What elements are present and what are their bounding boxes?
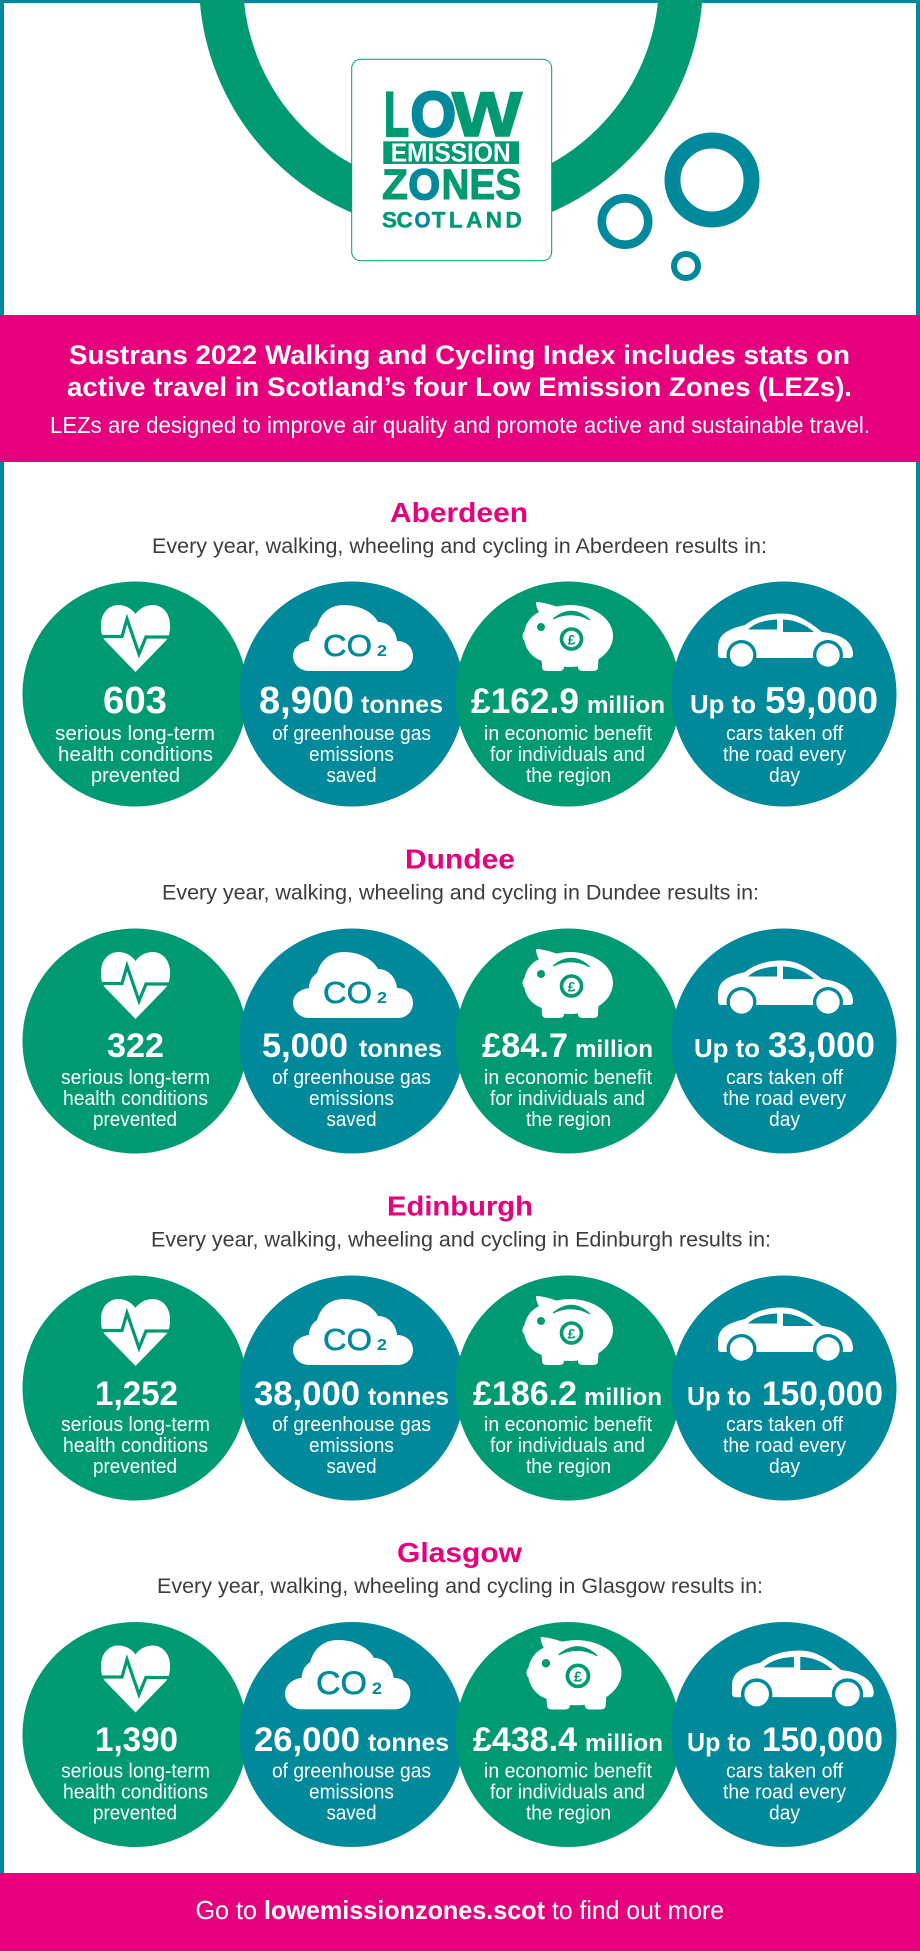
stat: greenhouse gas: [240, 582, 464, 806]
stat: greenhouse gas: CO: [323, 1322, 372, 1357]
panel: Dundee: [22, 844, 896, 1154]
bubble: medium: [602, 198, 648, 245]
stat: economic benefit: the region: [526, 765, 611, 787]
stat: cars: the road every: [723, 744, 846, 766]
stat: greenhouse gas: of greenhouse gas: [272, 1414, 431, 1436]
stat: greenhouse gas: tonnes: [361, 691, 443, 719]
stat: economic benefit: £162.9: [471, 682, 579, 721]
stat: economic benefit: in economic benefit: [484, 1067, 652, 1089]
bubble: small: [674, 254, 698, 278]
stat: health conditions: prevented: [93, 1456, 177, 1478]
stat: cars: [672, 582, 896, 806]
stat: greenhouse gas: 2: [377, 1337, 387, 1354]
stat: cars: day: [769, 1456, 800, 1478]
stat: health conditions: health conditions: [63, 1782, 208, 1804]
stat: economic benefit: the region: [526, 1802, 611, 1824]
panel: Aberdeen: [22, 497, 896, 806]
stat: cars: [672, 928, 896, 1154]
stat: health conditions: 603: [103, 680, 167, 722]
intro text: Aberdeen: Every year, walking, wheeling and cycling in Aberdeen results in:: [152, 534, 767, 558]
stat: economic benefit: million: [587, 692, 665, 719]
stat: economic benefit: in economic benefit: [484, 1414, 652, 1436]
stat: economic benefit: [456, 1276, 680, 1500]
stat: health conditions: [22, 1622, 248, 1847]
stat: greenhouse gas: 2: [377, 643, 387, 660]
stat: cars: cars taken off: [726, 1760, 843, 1782]
bubble: large: [672, 140, 752, 220]
stat: greenhouse gas: 38,000: [254, 1375, 360, 1413]
stat: greenhouse gas: saved: [326, 1802, 376, 1824]
stat: health conditions: [22, 928, 248, 1154]
stat: greenhouse gas: [240, 928, 464, 1154]
stat: greenhouse gas: CO: [316, 1665, 367, 1701]
stat: economic benefit: in economic benefit: [484, 1760, 652, 1782]
stat: cars: the road every: [723, 1782, 846, 1804]
stat: health conditions: prevented: [91, 765, 180, 787]
stat: health conditions: serious long-term: [55, 723, 215, 745]
stat: greenhouse gas: [240, 1622, 464, 1847]
heading: Dundee: Dundee: [405, 844, 515, 875]
stat: greenhouse gas: emissions: [309, 1782, 394, 1804]
stat: health conditions: [22, 582, 248, 806]
intro banner: [0, 315, 920, 462]
stat: economic benefit: £438.4: [473, 1721, 577, 1759]
stat: cars: day: [769, 765, 800, 787]
logo card: TLAND: [432, 207, 522, 232]
footer banner: Go to: [196, 1895, 257, 1925]
stat: cars: day: [769, 1109, 800, 1131]
stat: cars: 150,000: [762, 1721, 883, 1759]
stat: cars: Up to: [687, 1727, 751, 1757]
stat: health conditions: serious long-term: [61, 1414, 210, 1436]
stat: economic benefit: for individuals and: [490, 1782, 645, 1804]
stat: economic benefit: for individuals and: [490, 1435, 645, 1457]
stat: cars: cars taken off: [726, 1067, 843, 1089]
stat: economic benefit: £84.7: [482, 1027, 568, 1065]
stat: cars: the road every: [723, 1435, 846, 1457]
stat: health conditions: 1,390: [95, 1721, 178, 1759]
stat: greenhouse gas: saved: [326, 1456, 376, 1478]
intro text: Dundee: Every year, walking, wheeling and cycling in Dundee results in:: [162, 881, 759, 905]
footer banner: to find out more: [552, 1895, 724, 1925]
stat: greenhouse gas: of greenhouse gas: [272, 1760, 431, 1782]
stat: greenhouse gas: tonnes: [368, 1729, 449, 1757]
stat: cars: day: [769, 1802, 800, 1824]
stat: greenhouse gas: 2: [377, 990, 387, 1007]
stat: greenhouse gas: 5,000: [262, 1027, 348, 1065]
stat: greenhouse gas: emissions: [309, 1435, 394, 1457]
footer banner: [0, 1873, 920, 1951]
stat: cars: [672, 1622, 896, 1847]
stat: health conditions: 1,252: [95, 1375, 178, 1413]
intro text: Glasgow: Every year, walking, wheeling and cycling in Glasgow results in:: [157, 1574, 763, 1598]
stat: cars: the road every: [723, 1088, 846, 1110]
stat: greenhouse gas: saved: [326, 1109, 376, 1131]
stat: greenhouse gas: 26,000: [254, 1721, 360, 1759]
footer banner: lowemissionzones.scot: [264, 1895, 545, 1925]
stat: cars: cars taken off: [726, 723, 843, 745]
logo card: L: [384, 80, 409, 150]
stat: health conditions: health conditions: [63, 1088, 208, 1110]
logo card: O: [414, 207, 430, 232]
stat: economic benefit: [456, 582, 680, 806]
logo card: EMISSION: [391, 138, 511, 168]
stat: health conditions: health conditions: [58, 744, 213, 766]
heading: Aberdeen: Aberdeen: [390, 497, 528, 528]
stat: economic benefit: in economic benefit: [484, 723, 652, 745]
stat: cars: cars taken off: [726, 1414, 843, 1436]
stat: economic benefit: million: [584, 1384, 662, 1411]
stat: greenhouse gas: emissions: [309, 1088, 394, 1110]
stat: economic benefit: [456, 1622, 680, 1847]
stat: economic benefit: the region: [526, 1109, 611, 1131]
stat: greenhouse gas: 8,900: [259, 680, 354, 722]
logo card: O: [410, 80, 456, 150]
stat: greenhouse gas: of greenhouse gas: [272, 723, 431, 745]
logo card: O: [408, 161, 440, 209]
logo card: Z: [382, 161, 408, 209]
logo card: W: [452, 80, 523, 150]
banner subtext: LEZs are designed to improve air quality and promote active and sustainable travel.: [50, 412, 870, 438]
stat: greenhouse gas: emissions: [309, 744, 394, 766]
banner heading: [67, 340, 852, 402]
heading: Edinburgh: Edinburgh: [387, 1190, 533, 1221]
stat: cars: [672, 1276, 896, 1500]
stat: greenhouse gas: tonnes: [368, 1383, 449, 1411]
stat: health conditions: prevented: [93, 1802, 177, 1824]
logo card: SC: [382, 207, 413, 232]
stat: health conditions: prevented: [93, 1109, 177, 1131]
panel: Glasgow: [22, 1537, 896, 1847]
logo card: NES: [442, 161, 521, 209]
banner heading: Sustrans 2022 Walking and Cycling Index includes stats on: [69, 340, 850, 370]
stat: economic benefit: for individuals and: [490, 1088, 645, 1110]
stat: economic benefit: million: [585, 1730, 663, 1757]
stat: greenhouse gas: 2: [372, 1680, 382, 1698]
stat: cars: 59,000: [765, 680, 878, 721]
stat: health conditions: serious long-term: [61, 1760, 210, 1782]
stat: greenhouse gas: CO: [323, 975, 372, 1010]
stat: health conditions: serious long-term: [61, 1067, 210, 1089]
banner heading: active travel in Scotland’s four Low Emission Zones (LEZs).: [67, 372, 852, 402]
stat: economic benefit: £186.2: [473, 1375, 577, 1413]
stat: greenhouse gas: CO: [323, 628, 372, 663]
intro text: Edinburgh: Every year, walking, wheeling and cycling in Edinburgh results in:: [151, 1227, 771, 1251]
stat: greenhouse gas: saved: [326, 765, 376, 787]
stat: economic benefit: million: [575, 1036, 653, 1063]
stat: cars: 33,000: [768, 1026, 875, 1065]
stat: cars: Up to: [687, 1381, 751, 1411]
header graphic: [221, 0, 752, 278]
large green ring: [221, 0, 681, 211]
stat: cars: 150,000: [762, 1375, 883, 1413]
stat: greenhouse gas: [240, 1276, 464, 1500]
stat: health conditions: 322: [107, 1027, 164, 1065]
stat: greenhouse gas: of greenhouse gas: [272, 1067, 431, 1089]
heading: Glasgow: Glasgow: [397, 1537, 522, 1568]
stat: greenhouse gas: tonnes: [359, 1035, 442, 1063]
stat: economic benefit: for individuals and: [490, 744, 645, 766]
logo card: [352, 59, 552, 261]
panel: Edinburgh: [22, 1190, 896, 1500]
stat: economic benefit: [456, 928, 680, 1154]
stat: health conditions: health conditions: [63, 1435, 208, 1457]
stat: economic benefit: the region: [526, 1456, 611, 1478]
stat: cars: Up to: [694, 1033, 760, 1063]
stat: cars: Up to: [690, 689, 756, 719]
stat: health conditions: [22, 1276, 248, 1500]
